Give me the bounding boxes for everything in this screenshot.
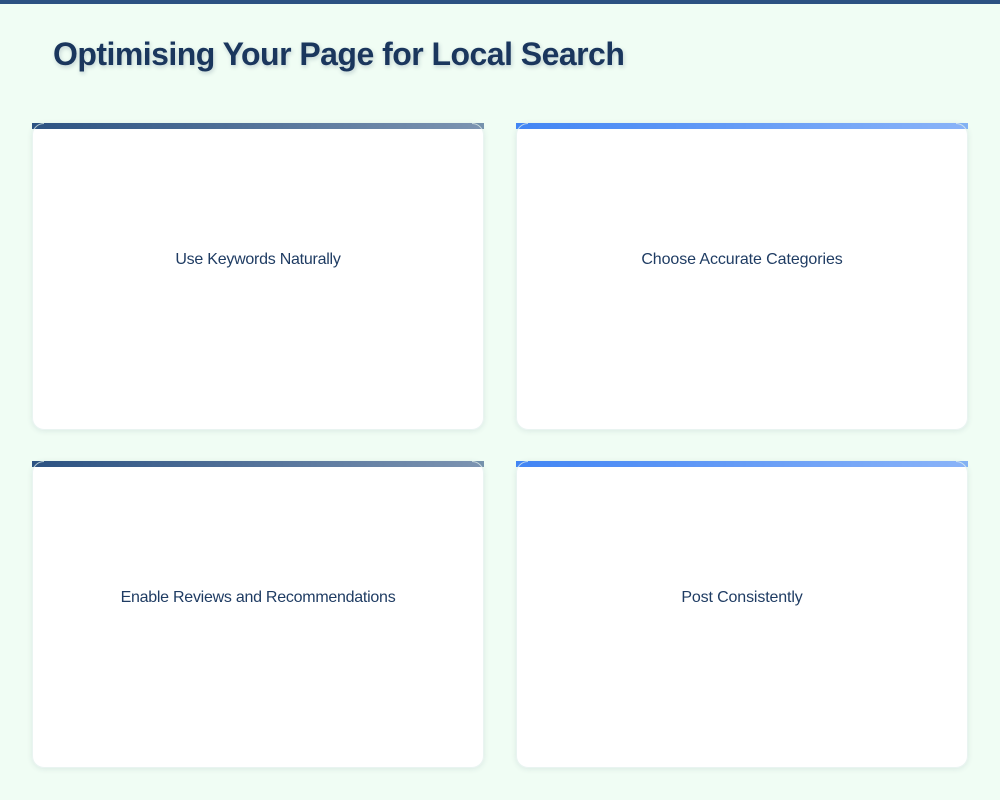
top accent bar (0, 0, 1000, 4)
panel accent bar: navy gradient (32, 123, 484, 129)
panel accent bar: navy gradient (32, 461, 484, 467)
panel accent bar: blue gradient (516, 461, 968, 467)
panel: post consistently (516, 461, 968, 768)
panel: choose accurate categories (516, 123, 968, 430)
panel text: use keywords naturally: Use Keywords Naturally (175, 251, 341, 268)
panel text: enable reviews and recommendations: Enable Reviews and Recommendations (121, 589, 395, 606)
panel text: choose accurate categories: Choose Accurate Categories (641, 251, 843, 268)
panel: use keywords naturally (32, 123, 484, 430)
title: Optimising Your Page for Local Search (53, 36, 624, 72)
panel: enable reviews and recommendations (32, 461, 484, 768)
panel text: post consistently: Post Consistently (681, 589, 803, 606)
panel accent bar: blue gradient (516, 123, 968, 129)
